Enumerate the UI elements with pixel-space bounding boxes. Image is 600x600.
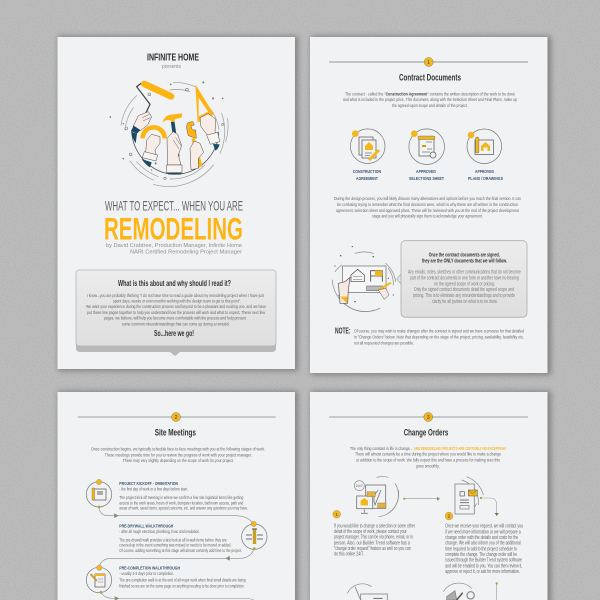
meeting 2 text: Of course, adding something at this stage will almost certainly add time to the project. <box>119 548 242 553</box>
byline: by David Crabtree, Production Manager, Infinite Home <box>106 243 242 249</box>
meeting 3 text <box>119 566 246 589</box>
illustration: signing plans <box>332 246 396 312</box>
sleeves <box>131 132 220 174</box>
intro paragraph: These may vary slightly depending on the scope of work for your project. <box>123 458 234 463</box>
hammer <box>173 122 178 157</box>
hand 3 <box>146 134 160 155</box>
design process paragraph: During the design process, you will likely discuss many alternatives and options before you reach the final version. It can <box>334 196 521 201</box>
design process paragraph: agreement, selection sheet and approved plans. These will be reviewed with you at the end of the project development <box>336 208 520 213</box>
page 3: site meetings <box>58 391 298 600</box>
intro paragraph: Once construction begins, we typically schedule face-to-face meetings with you at the following stages of work. <box>91 446 265 451</box>
section divider with number 2 <box>78 412 276 422</box>
meeting 1 text: access to the work areas, hours of work, dumpster location, bathroom access, path and <box>119 500 244 505</box>
intro paragraph: AND REMODELING PROJECTS ARE CERTAINLY NO EXCEPTION! <box>414 446 506 451</box>
note text: not all requested changes are possible. <box>354 340 414 345</box>
paint roller <box>137 83 150 113</box>
title line: WHAT TO EXPECT... WHEN YOU ARE <box>105 198 243 214</box>
presents label: presents <box>162 64 181 70</box>
meeting 2 text: covered-up in the event something was missed or needs to be moved or added. <box>119 543 231 548</box>
intro paragraph <box>343 91 517 108</box>
note text: in "Change Orders" below. Note that depending on the stage of the project, pricing, availability, feasibility etc, <box>354 334 524 339</box>
wrench <box>193 138 201 167</box>
callout sign-off: So...here we go! <box>154 329 194 338</box>
meeting 2 text: PRE-DRYWALL WALKTHROUGH <box>119 523 174 529</box>
step 1 badge: 1 <box>335 512 338 517</box>
section divider with number 3 <box>329 412 528 422</box>
design process paragraph: stage and you will physically sign them to acknowledge your agreement. <box>372 214 483 219</box>
design process paragraph <box>334 196 521 219</box>
note text: Of course, you may wish to make changes after the contract is signed and we have a process for that detailed <box>354 329 524 334</box>
main circle <box>132 130 219 174</box>
arrow: step 1 to step 2 <box>403 497 440 501</box>
icon: ways to contact <box>354 477 399 517</box>
hand 4 <box>190 141 204 170</box>
section divider with number 1: 1 <box>427 60 430 66</box>
intro paragraph <box>91 446 265 463</box>
intro paragraph: These meetings provide time for you to review the progress of work with your project manager. <box>105 452 252 457</box>
page 4: change orders <box>310 391 551 600</box>
meeting 2 text: The pre-drywall walk provides a last look at all in-wall items before they are <box>119 537 227 542</box>
byline <box>106 243 242 255</box>
callout body: Any emails, notes, sketches or other communications that do not become <box>408 270 521 276</box>
intro paragraph: The contract - called the "Construction Agreement" contains the written description of the work to be done <box>345 91 515 96</box>
heading: Site Meetings <box>155 428 196 439</box>
step 2 badge <box>445 512 453 520</box>
note text <box>354 329 524 345</box>
hand 5 <box>200 114 218 136</box>
step 1 badge <box>333 510 341 518</box>
callout body <box>86 293 266 326</box>
step 2 text: change. We will also inform you of the additional <box>445 541 521 547</box>
hand 2 <box>167 132 182 165</box>
meeting 2 text <box>119 523 242 553</box>
section divider with number 2: 2 <box>174 415 178 421</box>
callout body: part of the contract documents in one form or another have no bearing <box>410 276 519 282</box>
triangle ruler <box>195 84 214 123</box>
step 2 text: time required to add to the project schedule to <box>445 546 517 552</box>
meeting 3 text: finished so we are on the same page on anything needing to be done prior to completion. <box>119 584 245 589</box>
meeting 1 text: The project kick off meeting is where we confirm a few site logistical items like getting <box>119 495 244 500</box>
icon captions: SELECTIONS SHEET <box>409 176 444 182</box>
callout heading: What is this about and why should I read it? <box>118 279 231 288</box>
heading: Change Orders <box>404 428 448 439</box>
page 2: contract documents <box>310 36 551 375</box>
intro paragraph: and what is included in the project price. This document, along with the Selection Sheet and Final Plans, make up <box>343 97 517 102</box>
meeting 2 text: - after all rough electrical, plumbing, hvac and insulation. <box>119 529 200 534</box>
icon captions: APPROVED <box>475 169 494 175</box>
meeting 1 text <box>119 481 248 511</box>
icon captions: AGREEMENT <box>356 176 378 182</box>
callout body: some common misunderstandings that can come up during a remodel. <box>122 321 230 326</box>
step 2 text: if we need more information or we will prepare a <box>445 529 521 535</box>
callout body: on the agreed scope of work or pricing. <box>434 282 495 288</box>
callout body: Only the signed contract documents detail the agreed scope and <box>414 287 514 293</box>
step 2 text: and will be emailed to you. You can then review it, <box>445 563 522 569</box>
callout body: pages, we believe, will help you become more comfortable with the process and help prevent <box>104 316 247 321</box>
icon: change order document <box>455 477 483 514</box>
intro paragraph: the agreed-upon scope and details of the project. <box>392 103 468 108</box>
icon captions: PLANS / DRAWINGS <box>468 176 504 182</box>
illustration: hands holding tools <box>109 81 228 186</box>
arrow: step 2 to step 3 <box>480 497 499 516</box>
callout: what is this about <box>76 270 276 356</box>
callout heading: Once the contract documents are signed, <box>429 253 500 259</box>
protractor <box>143 127 165 138</box>
section divider with number 3: 3 <box>427 415 430 421</box>
intro paragraph: or addition to the scope of work. We fully expect this and have a process for making sure this <box>356 458 500 463</box>
callout body: spent days, weeks or even months working with the design team to get to this point". <box>113 298 241 304</box>
step 1 text: "change order request" feature as well so you can <box>334 546 411 552</box>
step 1 text: project manager. This can be via phone, email, or in <box>334 535 413 541</box>
step 2 text: issued through the Builder Trend system software <box>445 558 522 564</box>
intro paragraph: The only thing constant in life is change... <box>350 446 412 451</box>
step 2 text: Once we receive your request, we will contact you <box>445 524 523 530</box>
icon captions: APPROVED <box>416 169 436 175</box>
meeting 3 text: - usually 2-3 days prior to completion. <box>119 571 174 576</box>
icon: ways to contact: 24/7 <box>356 484 363 488</box>
hand 1 <box>133 112 152 131</box>
meeting 1 icon <box>86 479 112 508</box>
callout body: put these few pages together to help you understand how the process will work and what to expect. These next few <box>87 310 265 315</box>
icon: step 3 laptop (cropped) <box>347 584 387 600</box>
callout body: clarity for all parties on what is to be done. <box>432 299 498 305</box>
heading: Contract Documents <box>399 73 461 84</box>
step 2 text: complete the change. The change order will be <box>445 552 517 558</box>
step 2 badge: 2 <box>448 514 451 519</box>
callout body: pricing. This is to eliminate any misunderstandings and to provide <box>413 293 515 299</box>
meeting 1 text: - the first day of work or a few days before start. <box>119 487 188 492</box>
meeting 1 text: PROJECT KICKOFF - ORIENTATION <box>119 481 178 487</box>
icon captions <box>353 169 504 182</box>
meeting 3 icon <box>86 565 112 594</box>
icon captions: CONSTRUCTION <box>353 169 381 175</box>
meeting 1 text: areas of work, saved items, special concerns, etc. and answer any questions you may have. <box>119 506 248 511</box>
callout body: I know...you are probably thinking "I do not have time to read a guide about my remodeling project when I have just <box>87 293 265 298</box>
design process paragraph: be confusing trying to remember what the final decisions were, which is why these are all written in the construction <box>337 202 518 207</box>
callout body: We want your experience during the construction process and beyond to be a pleasant and exciting one, and we have <box>86 304 266 309</box>
step 1 text: detail of the scope of work, please contact your <box>334 529 407 535</box>
callout heading <box>422 253 507 265</box>
intro paragraph: goes smoothly. <box>416 463 440 468</box>
connector path between meetings <box>99 507 255 600</box>
step 1 text: do this online 24/7. <box>334 552 364 558</box>
callout body <box>408 270 521 305</box>
section divider with number 1 <box>329 58 528 66</box>
step 1 text: If you would like to change a selection or some other <box>334 523 415 529</box>
note label: NOTE: <box>335 326 351 336</box>
step 1 text <box>334 523 415 558</box>
brand name: INFINITE HOME <box>147 52 199 64</box>
page 1: cover <box>58 36 298 371</box>
icon: construction agreement <box>350 129 385 164</box>
title: REMODELING: REMODELING <box>104 210 243 246</box>
arrow: step 4 to step 3 (cropped) <box>496 582 498 600</box>
callout heading: they are the ONLY documents that we will follow. <box>422 259 507 265</box>
byline: NARI Certified Remodeling Project Manager <box>130 249 242 255</box>
icon: plans and drawings <box>467 129 502 164</box>
intro paragraph <box>350 446 506 468</box>
step 2 text: approve or reject it, or ask for more information. <box>445 569 520 575</box>
meeting 2 icon <box>242 521 267 550</box>
step 2 text: change order with the details and costs for the <box>445 535 518 541</box>
icon: selections sheet <box>409 129 445 164</box>
callout: only documents we follow <box>397 241 527 317</box>
step 2 text <box>445 524 523 575</box>
icon: step 4 gauge and gear (cropped) <box>443 583 474 600</box>
meeting 3 text: The pre-completion walk is at the end of all major work when final small details are being <box>119 578 246 583</box>
step 1 text: person. Also, our Builder Trend software has a <box>334 540 410 546</box>
intro paragraph: There will almost certainly be a time during the project where you would like to make a change <box>355 452 501 457</box>
meeting 3 text: PRE-COMPLETION WALKTHROUGH <box>119 566 180 572</box>
